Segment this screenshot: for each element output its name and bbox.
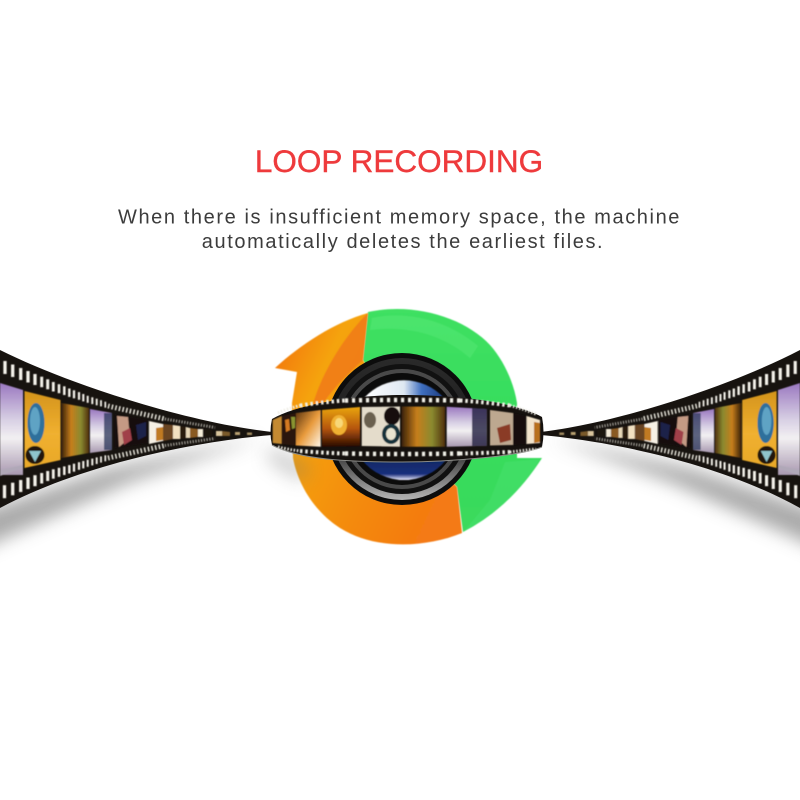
film sprocket holes [278,400,536,454]
left strip shadow [0,438,262,570]
right strip shadow [550,438,800,570]
green circular arrow [363,309,542,532]
right film strip in perspective [540,350,800,508]
description text: automatically deletes the earliest files. [202,231,604,253]
orange circular arrow [275,313,462,544]
loop recording emblem [265,309,544,544]
left film strip in perspective [0,350,272,508]
film frames [273,406,540,447]
band shadow [265,447,310,480]
camera lens [326,353,478,505]
film band wrapped around lens [270,395,544,462]
title: LOOP RECORDING [255,143,543,179]
description text: When there is insufficient memory space, the machine [118,206,681,228]
